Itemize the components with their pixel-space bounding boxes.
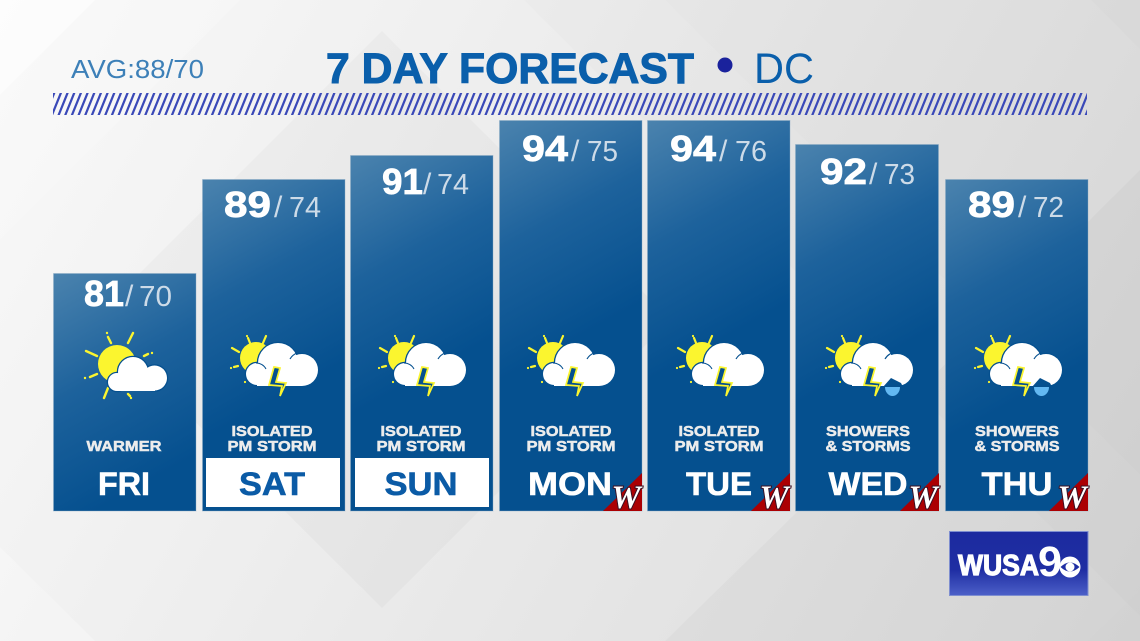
high and low temperature — [968, 184, 1064, 225]
high and low temperature: / — [125, 280, 134, 313]
day box — [355, 458, 489, 507]
station logo: 9 — [1038, 538, 1062, 586]
icon: thunderstorm — [677, 336, 764, 396]
condition — [974, 423, 1060, 455]
day: THU — [982, 466, 1052, 502]
icon: thunderstorm — [528, 336, 615, 396]
high and low temperature — [820, 151, 915, 192]
icon: showers and storms — [826, 336, 913, 396]
panel: Tuesday — [648, 120, 791, 516]
nationals corner logo — [751, 473, 791, 516]
high and low temperature: / — [869, 158, 878, 191]
panel: Thursday — [946, 180, 1089, 516]
high and low temperature: / — [423, 168, 432, 201]
condition: ISOLATED — [232, 423, 313, 440]
nationals corner logo — [1049, 473, 1089, 516]
condition: PM STORM — [228, 438, 316, 455]
panel: Friday — [54, 273, 196, 511]
day: WED — [828, 466, 908, 502]
nationals corner logo — [603, 473, 643, 516]
high and low temperature: 92 — [820, 151, 867, 192]
high and low temperature: 76 — [735, 136, 767, 168]
nationals corner logo — [900, 473, 940, 516]
high and low temperature: 89 — [968, 184, 1015, 225]
nationals corner logo: W — [611, 480, 643, 516]
icon: partly cloudy — [85, 333, 167, 398]
condition: & STORMS — [826, 438, 910, 455]
high and low temperature: 94 — [522, 128, 568, 169]
condition — [526, 423, 616, 455]
condition: PM STORM — [526, 438, 616, 455]
condition: SHOWERS — [975, 423, 1059, 440]
day box: SUN — [384, 466, 458, 502]
high and low temperature: 81 — [84, 273, 124, 314]
panel: Sunday — [350, 156, 493, 511]
condition: WARMER — [86, 438, 162, 455]
nationals corner logo: W — [1057, 480, 1089, 516]
condition — [376, 423, 466, 455]
high and low temperature: / — [274, 191, 283, 224]
station logo — [950, 532, 1088, 596]
high and low temperature: 94 — [670, 128, 716, 169]
panel: Monday — [500, 120, 643, 516]
icon: thunderstorm — [379, 336, 466, 396]
icon: thunderstorm — [231, 336, 318, 396]
hatched divider — [53, 93, 1087, 115]
day: MON — [528, 466, 612, 502]
day box: SAT — [239, 466, 305, 502]
high and low temperature — [382, 161, 469, 202]
high and low temperature: 89 — [224, 184, 271, 225]
high and low temperature: 72 — [1033, 192, 1064, 224]
condition: PM STORM — [674, 438, 764, 455]
high and low temperature: / — [1018, 191, 1027, 224]
average temperature: AVG:88/70 — [71, 56, 204, 84]
high and low temperature — [670, 128, 767, 169]
high and low temperature: 74 — [437, 169, 469, 201]
condition: ISOLATED — [380, 423, 462, 440]
title: 7 DAY FORECAST — [326, 45, 694, 93]
high and low temperature: 91 — [382, 161, 423, 202]
panel: Saturday — [202, 180, 345, 511]
high and low temperature: / — [719, 135, 728, 168]
high and low temperature: / — [571, 135, 580, 168]
high and low temperature: 75 — [587, 136, 618, 168]
high and low temperature: 74 — [289, 192, 321, 224]
station logo: WUSA — [958, 550, 1039, 582]
high and low temperature: 70 — [139, 281, 172, 313]
condition — [674, 423, 764, 455]
icon: CBS eye — [1060, 556, 1080, 578]
nationals corner logo: W — [908, 480, 940, 516]
high and low temperature — [224, 184, 321, 225]
panel: Wednesday — [796, 144, 940, 516]
condition: SHOWERS — [826, 423, 910, 440]
condition: ISOLATED — [530, 423, 612, 440]
condition — [228, 423, 316, 455]
high and low temperature — [522, 128, 618, 169]
condition: & STORMS — [974, 438, 1060, 455]
title: DC — [754, 45, 814, 93]
high and low temperature: 73 — [884, 159, 915, 191]
icon: showers and storms — [975, 336, 1062, 396]
day: TUE — [686, 466, 752, 502]
nationals corner logo: W — [759, 480, 791, 516]
day: FRI — [98, 466, 150, 502]
condition — [826, 423, 910, 455]
condition: ISOLATED — [678, 423, 760, 440]
condition: PM STORM — [376, 438, 466, 455]
high and low temperature — [84, 273, 172, 314]
day box — [206, 458, 340, 507]
